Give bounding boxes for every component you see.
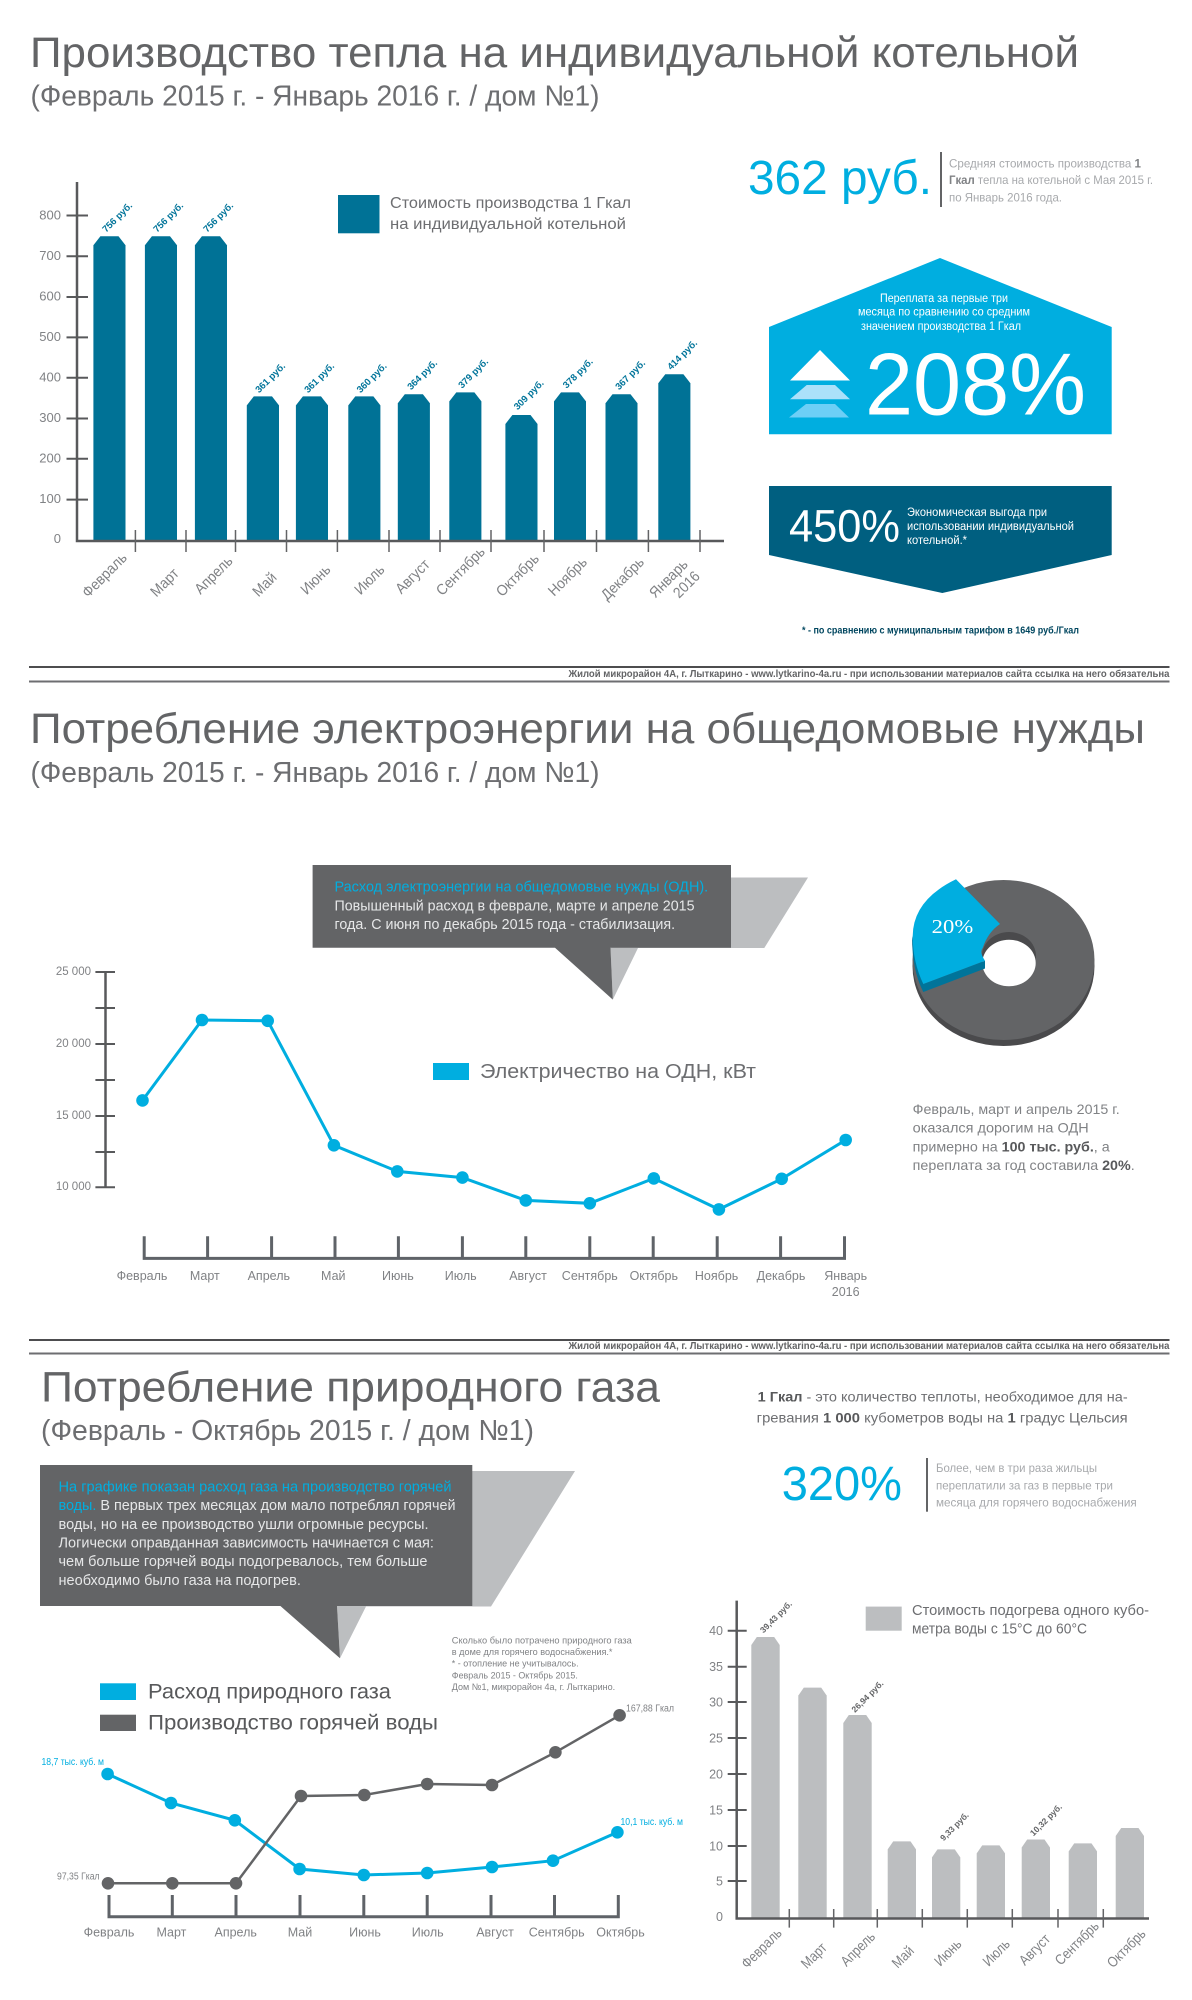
stat: 320 percent overpayment: 320% <box>782 1458 902 1511</box>
stat: 320 percent overpayment <box>782 1458 1137 1512</box>
bar chart: water heating cost: 5 <box>716 1874 723 1888</box>
bar chart: heat cost per Gcal: Май <box>250 570 281 601</box>
note: gas chart description: Февраль 2015 - Октябрь 2015. <box>452 1670 578 1681</box>
bar chart: heat cost per Gcal: 309 руб. <box>512 378 547 413</box>
bar chart: heat cost per Gcal: Февраль <box>79 550 131 601</box>
bar chart: water heating cost: 0 <box>716 1910 723 1924</box>
line chart: electricity usage: 25 000 <box>56 966 91 978</box>
line chart: gas vs hot water: 18,7 тыс. куб. м <box>42 1756 104 1768</box>
legend: water heating cost: Стоимость подогрева одного кубо- <box>912 1603 1149 1619</box>
bar chart: heat cost per Gcal: 100 <box>39 491 61 506</box>
bar chart: heat cost per Gcal: Август <box>392 556 434 598</box>
bar chart: water heating cost: 20 <box>709 1768 723 1782</box>
bar chart: water heating cost: 10 <box>709 1840 723 1854</box>
panel: electricity section <box>30 705 1145 1299</box>
legend: gas and hot water: Расход природного газа <box>148 1680 391 1703</box>
line chart: gas vs hot water: 167,88 Гкал <box>626 1704 674 1715</box>
legend: heat cost: на индивидуальной котельной <box>390 216 626 233</box>
line chart: electricity usage: Июнь <box>382 1269 414 1283</box>
line chart: gas vs hot water: Июль <box>412 1926 444 1940</box>
bar chart: heat cost per Gcal: 756 руб. <box>100 200 135 235</box>
bar chart: heat cost per Gcal: 361 руб. <box>253 361 288 396</box>
line chart: gas vs hot water: Октябрь <box>596 1926 645 1940</box>
line chart: electricity usage: Январь <box>824 1269 867 1283</box>
bar chart: water heating cost: Май <box>889 1943 917 1971</box>
title: heat production: Производство тепла на индивидуальной котельной <box>30 29 1079 77</box>
bar chart: heat cost per Gcal: 400 <box>39 370 61 384</box>
title: natural gas: Потребление природного газа <box>41 1364 660 1412</box>
legend: electricity: Электричество на ОДН, кВт <box>480 1061 756 1083</box>
bar chart: heat cost per Gcal: 300 <box>39 410 61 425</box>
text block: electricity overpayment: Февраль, март и апрель 2015 г. <box>913 1101 1120 1117</box>
bar chart: water heating cost: 15 <box>709 1804 723 1818</box>
callout: economic benefit 450 percent: Экономическая выгода при <box>907 507 1047 519</box>
bar chart: heat cost per Gcal: Апрель <box>192 553 236 598</box>
legend: gas and hot water <box>100 1680 438 1734</box>
callout: common-area electricity: года. С июня по декабрь 2015 года - стабилизация. <box>334 917 675 933</box>
line chart: electricity usage: Июль <box>445 1269 477 1283</box>
stat: average cost 362 rubles <box>748 152 1153 207</box>
callout: gas explanation: воды. В первых трех месяцах дом мало потреблял горячей <box>58 1497 456 1514</box>
bar chart: heat cost per Gcal: Июль <box>352 562 388 598</box>
line chart: electricity usage: Февраль <box>117 1269 167 1283</box>
callout: economic benefit 450 percent: 450% <box>789 500 900 551</box>
callout: gas explanation: чем больше горячей воды подогревалось, тем больше <box>58 1553 428 1570</box>
panel: natural gas section <box>40 1364 1149 1972</box>
callout: overpayment 208 percent: значением производства 1 Гкал <box>861 321 1021 333</box>
legend: heat cost: Стоимость производства 1 Гкал <box>390 195 631 212</box>
stat: average cost 362 rubles: Средняя стоимость производства 1 <box>949 156 1141 170</box>
bar chart: heat cost per Gcal: Ноябрь <box>545 554 591 600</box>
bar chart: heat cost per Gcal: 360 руб. <box>355 361 389 396</box>
bar chart: heat cost per Gcal: 756 руб. <box>151 200 186 235</box>
bar chart: heat cost per Gcal: 600 <box>39 288 61 304</box>
note: gas chart description: в доме для горячего водоснабжения.* <box>452 1647 613 1658</box>
text block: electricity overpayment: переплата за год составила 20%. <box>913 1157 1135 1173</box>
line chart: gas vs hot water <box>42 1704 683 1940</box>
note: gas chart description: Дом №1, микрорайон 4а, г. Лыткарино. <box>452 1682 615 1693</box>
bar chart: heat cost per Gcal <box>39 182 724 604</box>
bar chart: water heating cost: 40 <box>709 1624 723 1638</box>
note: gas chart description: Сколько было потрачено природного газа <box>452 1635 632 1646</box>
line chart: electricity usage: Октябрь <box>630 1269 678 1283</box>
callout: common-area electricity <box>313 865 808 1000</box>
line chart: electricity usage: 10 000 <box>56 1181 91 1193</box>
text block: electricity overpayment: оказался дорогим на ОДН <box>913 1120 1089 1136</box>
stat: average cost 362 rubles: Гкал тепла на котельной с Мая 2015 г. <box>949 173 1153 187</box>
text block: electricity overpayment: примерно на 100 тыс. руб., а <box>913 1139 1110 1155</box>
line chart: gas vs hot water: Апрель <box>214 1926 257 1940</box>
line chart: electricity usage: 15 000 <box>56 1110 91 1122</box>
bar chart: water heating cost: Август <box>1016 1931 1053 1968</box>
line chart: gas vs hot water: Март <box>156 1926 187 1940</box>
pie chart: 20 percent overpayment <box>912 879 1094 1046</box>
stat: 320 percent overpayment: переплатили за газ в первые три <box>936 1478 1113 1492</box>
bar chart: heat cost per Gcal: Декабрь <box>598 554 648 604</box>
line chart: electricity usage: Август <box>509 1269 547 1283</box>
text block: Gcal definition: 1 Гкал - это количество теплоты, необходимое для на- <box>758 1389 1128 1405</box>
line chart: electricity usage: Сентябрь <box>562 1269 618 1283</box>
callout: gas explanation: необходимо было газа на подогрев. <box>58 1572 301 1589</box>
line chart: electricity usage: Май <box>321 1269 346 1283</box>
callout: economic benefit 450 percent: котельной.* <box>907 535 968 547</box>
bar chart: water heating cost: 26,94 руб. <box>849 1678 885 1714</box>
callout: common-area electricity: Расход электроэнергии на общедомовые нужды (ОДН). <box>334 879 708 895</box>
bar chart: heat cost per Gcal: 414 руб. <box>665 338 700 373</box>
bar chart: heat cost per Gcal: 700 <box>39 248 61 263</box>
bar chart: water heating cost: 39,43 руб. <box>758 1599 794 1635</box>
footnote: municipal tariff: * - по сравнению с муниципальным тарифом в 1649 руб./Гкал <box>802 626 1079 637</box>
bar chart: heat cost per Gcal: 200 <box>39 450 61 466</box>
legend: gas and hot water: Производство горячей воды <box>148 1711 438 1734</box>
bar chart: heat cost per Gcal: 800 <box>39 208 61 222</box>
callout: gas explanation: На графике показан расход газа на производство горячей <box>58 1479 452 1496</box>
title: electricity: Потребление электроэнергии на общедомовые нужды <box>30 705 1145 753</box>
bar chart: water heating cost: Июль <box>979 1936 1013 1969</box>
callout: overpayment 208 percent: 208% <box>865 335 1086 434</box>
callout: overpayment 208 percent <box>769 258 1112 434</box>
bar chart: heat cost per Gcal: 500 <box>39 329 61 344</box>
callout: gas explanation: воды, но на ее производство ушли огромные ресурсы. <box>58 1516 428 1533</box>
bar chart: water heating cost: Октябрь <box>1104 1926 1149 1971</box>
bar chart: heat cost per Gcal: 0 <box>54 531 61 546</box>
line chart: electricity usage: Март <box>190 1269 220 1283</box>
callout: common-area electricity: Повышенный расход в феврале, марте и апреле 2015 <box>334 899 694 915</box>
bar chart: water heating cost <box>709 1599 1149 1972</box>
text block: Gcal definition <box>757 1389 1128 1426</box>
bar chart: heat cost per Gcal: 361 руб. <box>302 361 337 396</box>
line chart: gas vs hot water: Август <box>476 1926 514 1940</box>
bar chart: water heating cost: Апрель <box>837 1928 878 1969</box>
callout: economic benefit 450 percent: использовании индивидуальной <box>907 521 1074 533</box>
bar chart: water heating cost: Июнь <box>931 1936 965 1969</box>
bar chart: heat cost per Gcal: 379 руб. <box>456 356 491 391</box>
line chart: electricity usage: 2016 <box>832 1285 860 1299</box>
subtitle: gas period: (Февраль - Октябрь 2015 г. / дом №1) <box>41 1415 534 1447</box>
stat: average cost 362 rubles: 362 руб. <box>748 152 932 205</box>
line chart: electricity usage: Декабрь <box>757 1269 805 1283</box>
bar chart: water heating cost: Сентябрь <box>1052 1918 1102 1968</box>
text block: Gcal definition: гревания 1 000 кубометров воды на 1 градус Цельсия <box>757 1410 1128 1426</box>
legend: water heating cost: метра воды с 15°С до 60°С <box>912 1622 1087 1638</box>
line chart: gas vs hot water: 10,1 тыс. куб. м <box>620 1816 683 1828</box>
icon: stacked up arrow <box>789 350 850 418</box>
bar chart: water heating cost: Февраль <box>738 1925 785 1972</box>
bar chart: water heating cost: 10,32 руб. <box>1028 1802 1064 1838</box>
stat: 320 percent overpayment: месяца для горячего водоснабжения <box>936 1496 1137 1510</box>
subtitle: heat production period: (Февраль 2015 г. - Январь 2016 г. / дом №1) <box>30 80 600 112</box>
legend: heat cost <box>338 195 631 233</box>
line chart: electricity usage <box>56 966 867 1299</box>
bar chart: heat cost per Gcal: Октябрь <box>493 551 543 600</box>
bar chart: heat cost per Gcal: 378 руб. <box>561 356 596 391</box>
bar chart: water heating cost: 30 <box>709 1696 723 1710</box>
text block: electricity overpayment <box>913 1101 1135 1173</box>
stat: 320 percent overpayment: Более, чем в три раза жильцы <box>936 1461 1097 1475</box>
bar chart: heat cost per Gcal: 2016 <box>670 568 704 602</box>
note: gas chart description <box>452 1635 632 1693</box>
line chart: electricity usage: Ноябрь <box>695 1269 738 1283</box>
line chart: gas vs hot water: Февраль <box>84 1926 134 1940</box>
stat: average cost 362 rubles: по Январь 2016 года. <box>949 190 1062 204</box>
line chart: gas vs hot water: 97,35 Гкал <box>57 1871 100 1882</box>
callout: economic benefit 450 percent <box>769 486 1112 593</box>
pie chart: 20 percent overpayment: 20% <box>932 916 973 938</box>
bar chart: water heating cost: 9,33 руб. <box>938 1810 971 1843</box>
bar chart: water heating cost: 25 <box>709 1732 723 1746</box>
line chart: gas vs hot water: Сентябрь <box>529 1926 585 1940</box>
line chart: electricity usage: Апрель <box>248 1269 290 1283</box>
bar chart: heat cost per Gcal: 756 руб. <box>201 200 236 235</box>
line chart: gas vs hot water: Июнь <box>349 1926 381 1940</box>
bar chart: water heating cost: 35 <box>709 1660 723 1674</box>
line chart: gas vs hot water: Май <box>288 1926 312 1940</box>
line chart: electricity usage: 20 000 <box>56 1038 91 1050</box>
note: gas chart description: * - отопление не учитывалось. <box>452 1659 579 1670</box>
callout: gas explanation: Логически оправданная зависимость начинается с мая: <box>58 1534 434 1551</box>
bar chart: heat cost per Gcal: 367 руб. <box>613 358 648 393</box>
callout: overpayment 208 percent: месяца по сравнению со средним <box>858 307 1030 319</box>
bar chart: heat cost per Gcal: Март <box>148 565 183 601</box>
panel: heat production section <box>30 29 1153 637</box>
callout: gas explanation <box>40 1465 575 1658</box>
bar chart: heat cost per Gcal: 364 руб. <box>405 358 440 393</box>
bar chart: water heating cost: Март <box>798 1939 830 1972</box>
bar chart: heat cost per Gcal: Июнь <box>298 562 334 598</box>
bar chart: heat cost per Gcal: Сентябрь <box>433 544 489 599</box>
bar chart: heat cost per Gcal: Январь <box>646 556 692 602</box>
subtitle: electricity period: (Февраль 2015 г. - Январь 2016 г. / дом №1) <box>30 757 600 789</box>
callout: overpayment 208 percent: Переплата за первые три <box>880 293 1008 305</box>
legend: water heating cost <box>866 1603 1149 1638</box>
